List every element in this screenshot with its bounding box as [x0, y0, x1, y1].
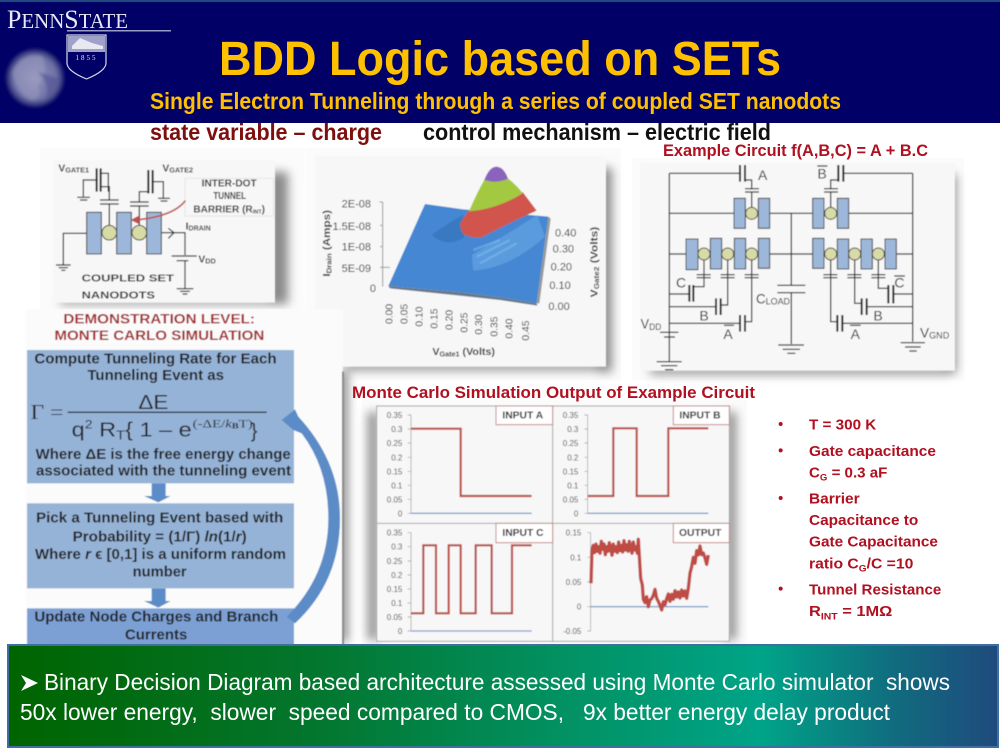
chart heading: Monte Carlo Simulation Output of Example Circuit	[352, 383, 755, 402]
horizontal axes: 0.10	[549, 280, 571, 292]
circuit labels: GND	[929, 331, 950, 341]
circuit labels: B	[817, 166, 827, 182]
chart: input B: 0.15	[563, 467, 579, 476]
panel heading: DEMONSTRATION LEVEL:	[63, 310, 255, 326]
chart: input B: 0.2	[567, 453, 579, 462]
SET islands and dots	[87, 212, 161, 254]
horizontal axes: 0.30	[474, 314, 485, 335]
wiring	[56, 168, 197, 294]
circuit labels: COUPLED SET	[82, 274, 175, 285]
logo: Penn State	[5, 5, 171, 108]
vertical axis	[322, 198, 390, 295]
circuit labels: A	[723, 326, 733, 342]
chart: input A: 0.35	[387, 411, 403, 420]
parameter bullet list: Gate capacitance	[809, 444, 936, 460]
horizontal axes: 0.45	[521, 320, 532, 341]
panel shadows	[60, 168, 956, 642]
step 1: tunneling rate: (-ΔE/k	[193, 417, 230, 430]
horizontal axes: 0.25	[459, 312, 470, 333]
step 1: tunneling rate: { 1 – e	[125, 420, 192, 442]
chart: input C: 0.15	[387, 585, 403, 594]
horizontal axes: 0.05	[399, 304, 410, 324]
chart: input A: INPUT A	[502, 411, 544, 422]
curved feedback arrow	[282, 409, 340, 623]
chart: input A: 0.1	[391, 481, 403, 490]
chart: input A: 0.3	[391, 425, 403, 434]
icon: bullet arrowhead	[21, 675, 38, 691]
parameter bullet list: Tunnel Resistance	[809, 582, 941, 598]
summary banner	[8, 645, 998, 747]
vertical axis: 0	[370, 283, 376, 295]
chart: output: 0.05	[566, 578, 582, 587]
chart: input A: 0	[398, 509, 403, 518]
circuit labels	[58, 164, 216, 301]
barrier callout: INTER-DOT	[202, 179, 257, 190]
horizontal axes: V	[432, 347, 439, 358]
chart: output: 0.15	[566, 529, 582, 538]
step 1: tunneling rate: associated with the tunneling event	[36, 464, 291, 480]
circuit labels: C	[756, 290, 766, 306]
chart: input C: 0.05	[387, 613, 403, 622]
parameter bullet list: C	[809, 465, 820, 481]
horizontal axes: Gate2	[594, 266, 601, 289]
parameter bullet list: = 1MΩ	[838, 604, 893, 620]
chart: input C: INPUT C	[502, 528, 544, 539]
chart: output: -0.05	[563, 627, 582, 636]
surface	[388, 204, 551, 306]
step 3: update charges	[27, 608, 294, 645]
step 1: tunneling rate: R	[93, 420, 116, 442]
chart: input A: 0.25	[387, 439, 403, 448]
circuit labels: GATE1	[65, 166, 89, 175]
step 2: pick event: Where r ϵ [0,1] is a uniform random	[35, 547, 286, 563]
circuit labels: DD	[205, 256, 216, 265]
chart: input B: INPUT B	[679, 411, 721, 422]
banner line 1: Binary Decision Diagram based architecture assessed using Monte Carlo simulator shows	[44, 669, 950, 695]
circuit labels	[641, 166, 950, 342]
title: BDD Logic based on SETs	[219, 33, 781, 86]
parameter bullet list: INT	[821, 611, 838, 621]
panel: coupled SET nanodots circuit	[53, 160, 275, 303]
chart: input B: 0.35	[563, 411, 579, 420]
circuit labels: DRAIN	[189, 225, 211, 232]
step 1: tunneling rate: 2	[85, 418, 93, 432]
panel: simulation waveform charts	[377, 406, 729, 641]
chart: input A: 0.15	[387, 467, 403, 476]
parameter bullet list: = 0.3 aF	[827, 465, 887, 481]
panel: Monte Carlo simulation flow	[26, 309, 344, 652]
chart: input C: 0.25	[387, 557, 403, 566]
step 1: tunneling rate: Where ΔE is the free energy change	[36, 447, 291, 463]
barrier callout: )	[262, 204, 265, 215]
step 1: tunneling rate: q	[72, 420, 83, 442]
vertical axis: Drain	[326, 253, 333, 273]
logo: Penn State: PENNSTATE	[7, 5, 128, 34]
parameter bullet list: Barrier	[809, 491, 860, 507]
SET islands	[686, 198, 896, 270]
circuit labels: DD	[649, 322, 662, 332]
chart: input A: 0.05	[387, 495, 403, 504]
barrier callout	[131, 178, 273, 224]
step 1: tunneling rate: }	[251, 420, 258, 443]
panel: 3D drain current surface plot	[315, 156, 606, 367]
horizontal axes: 0.20	[444, 310, 455, 330]
banner line 2: 50x lower energy, slower speed compared to CMOS, 9x better energy delay product	[20, 699, 891, 725]
step 2: pick event	[27, 503, 294, 588]
step 2: pick event: number	[133, 565, 187, 581]
parameter bullet list: /C =10	[867, 556, 913, 572]
circuit labels: V	[162, 164, 169, 175]
chart: output: OUTPUT	[679, 528, 722, 539]
circuit labels: A	[758, 167, 768, 183]
arrow: step 1 to 2	[144, 483, 171, 502]
parameter bullet list: R	[809, 604, 820, 620]
step 1: tunneling rate: T)	[239, 417, 253, 430]
example circuit heading: Example Circuit f(A,B,C) = A + B.C	[663, 141, 928, 160]
horizontal axes: 0.35	[489, 316, 500, 337]
parameter bullet list: G	[859, 564, 867, 574]
panel heading: MONTE CARLO SIMULATION	[54, 327, 264, 343]
barrier callout: TUNNEL	[213, 191, 246, 202]
horizontal axes: (Volts)	[460, 347, 495, 358]
chart: output	[563, 523, 729, 636]
parameter bullet list: T = 300 K	[809, 417, 877, 433]
step 1: tunneling rate	[27, 350, 294, 483]
green band	[469, 178, 523, 211]
panel: example circuit schematic	[640, 163, 955, 371]
control mechanism text: control mechanism – electric field	[423, 119, 771, 145]
horizontal axes: 0.20	[551, 261, 572, 273]
horizontal axes: V	[590, 290, 601, 297]
circuit labels: V	[920, 324, 929, 340]
horizontal axes: Gate1	[439, 351, 460, 358]
step 1: tunneling rate: Γ =	[31, 402, 63, 424]
step 1: tunneling rate: Compute Tunneling Rate for Each	[34, 351, 277, 367]
vertical axis: 1E-08	[342, 242, 371, 254]
vertical axis: 1.5E-08	[333, 221, 371, 233]
horizontal axes	[384, 227, 601, 358]
wires	[657, 165, 925, 370]
horizontal axes: 0.00	[384, 304, 395, 324]
circuit labels: A	[851, 326, 861, 342]
circuit labels: NANODOTS	[82, 290, 155, 301]
parameter bullet list: G	[820, 473, 827, 483]
parameter bullet list: Capacitance to	[809, 513, 918, 529]
parameter bullet list	[779, 417, 941, 621]
step 3: update charges: Update Node Charges and Branch	[34, 610, 278, 626]
panel halo background	[40, 148, 964, 645]
circuit labels: V	[198, 254, 205, 265]
chart: input C: 0	[398, 627, 403, 636]
vertical axis: I	[322, 274, 333, 277]
horizontal axes: 0.00	[548, 301, 570, 313]
circuit labels: V	[641, 316, 650, 332]
chart: input B: 0.05	[563, 495, 579, 504]
horizontal axes: 0.40	[555, 228, 576, 240]
chart: input C: 0.1	[391, 599, 403, 608]
chart: input A	[387, 406, 553, 518]
circuit labels: I	[186, 221, 189, 232]
panel heading	[54, 310, 264, 343]
chart: input B: 0.1	[567, 481, 579, 490]
circuit labels: GATE2	[169, 166, 193, 175]
arrow: step 2 to 3	[144, 588, 171, 608]
parameter bullet list: Gate Capacitance	[809, 535, 938, 551]
chart: input B: 0.25	[563, 439, 579, 448]
step 3: update charges: Currents	[125, 627, 187, 643]
circuit labels: C	[894, 275, 904, 291]
subtitle: Single Electron Tunneling through a series of coupled SET nanodots	[150, 88, 841, 114]
chart: input C: 0.3	[391, 543, 403, 552]
parameter bullet list: ratio C	[809, 556, 855, 572]
vertical axis: 2E-08	[342, 198, 371, 210]
circuit labels: LOAD	[766, 297, 790, 307]
chart: input C	[387, 523, 553, 636]
horizontal axes: 0.40	[504, 318, 515, 339]
circuit labels: B	[873, 308, 883, 324]
barrier callout: INT	[253, 210, 262, 216]
circuit labels: C	[676, 275, 686, 291]
circuit labels: B	[699, 308, 709, 324]
purple cap	[484, 167, 508, 182]
header band	[0, 0, 1000, 123]
step 1: tunneling rate: T	[116, 428, 125, 442]
chart: input B: 0.3	[567, 425, 579, 434]
chart: output: 0.1	[570, 553, 582, 562]
state variable text: state variable – charge	[150, 119, 382, 145]
chart: input C: 0.2	[391, 571, 403, 580]
horizontal axes: 0.30	[553, 243, 574, 255]
barrier callout: BARRIER (R	[193, 204, 254, 215]
surface peak	[460, 167, 537, 238]
chart: input A: 0.2	[391, 453, 403, 462]
horizontal axes: 0.15	[429, 308, 440, 329]
step 1: tunneling rate: Tunneling Event as	[87, 368, 224, 384]
vertical axis: (Amps)	[322, 210, 333, 253]
circuit labels: V	[58, 164, 65, 175]
chart: output: 0	[577, 603, 582, 612]
horizontal axes: 0.10	[414, 306, 425, 327]
vertical axis: 5E-09	[342, 263, 371, 275]
horizontal axes: (Volts)	[590, 227, 601, 267]
step 1: tunneling rate: ΔE	[138, 391, 168, 414]
chart: input B: 0	[574, 509, 579, 518]
logo: Penn State: 1855	[76, 54, 98, 62]
step 2: pick event: Pick a Tunneling Event based with	[36, 511, 283, 527]
step 1: tunneling rate: B	[232, 422, 240, 431]
step 2: pick event: Probability = (1/Γ) ln(1/r)	[73, 530, 247, 546]
red band	[460, 192, 537, 238]
chart: input B	[563, 406, 729, 518]
chart: input C: 0.35	[387, 529, 403, 538]
